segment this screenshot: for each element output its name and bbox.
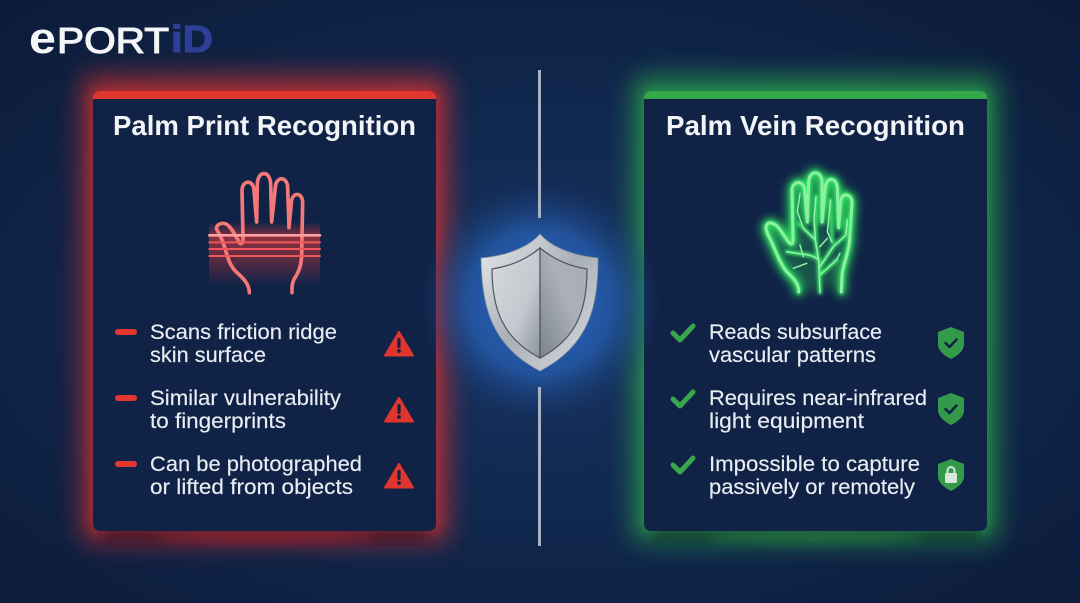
item 1: vascular patterns (709, 344, 876, 367)
center divider (538, 70, 541, 546)
logo: ePORTiD: e (29, 14, 56, 63)
item 3: Impossible to capture (709, 453, 920, 476)
item 2: light equipment (709, 410, 864, 433)
icon: shield lock (938, 459, 964, 491)
item 2: to fingerprints (150, 410, 286, 433)
panel glow: green (633, 76, 998, 544)
item 3 (673, 453, 920, 499)
item 2 (115, 387, 342, 433)
item 3 (115, 453, 362, 499)
panel top bar (93, 91, 436, 99)
shield glow (418, 180, 662, 424)
heading: Palm Vein Recognition (666, 110, 965, 141)
icon: warning 2 (385, 398, 413, 422)
item 1: skin surface (150, 344, 266, 367)
item 2 (673, 387, 927, 433)
icon: scanned hand (209, 173, 320, 293)
item 1: Scans friction ridge (150, 321, 337, 344)
item 1 (115, 321, 337, 367)
icon: silver shield (481, 234, 598, 371)
icon: shield check 2 (938, 393, 964, 425)
panel glow: red (82, 76, 448, 544)
logo: ePORTiD: iD (171, 19, 213, 61)
item 2: Similar vulnerability (150, 387, 342, 410)
icon: shield check 1 (938, 327, 964, 359)
logo: ePORTiD: PORT (57, 20, 169, 61)
panel body (93, 92, 436, 531)
panel: palm vein (633, 76, 998, 544)
item 1: Reads subsurface (709, 321, 882, 344)
item 3: Can be photographed (150, 453, 362, 476)
logo: ePORTiD (29, 14, 213, 63)
icon: warning 3 (385, 464, 413, 488)
item 2: Requires near-infrared (709, 387, 927, 410)
item 3: passively or remotely (709, 476, 916, 499)
panel body (644, 92, 987, 531)
item 1 (673, 321, 882, 367)
item 3: or lifted from objects (150, 476, 353, 499)
heading: Palm Print Recognition (113, 110, 416, 141)
panel top bar (644, 91, 987, 99)
icon: warning 1 (385, 332, 413, 356)
panel: palm print (82, 76, 448, 544)
icon: hand with veins (766, 173, 852, 293)
